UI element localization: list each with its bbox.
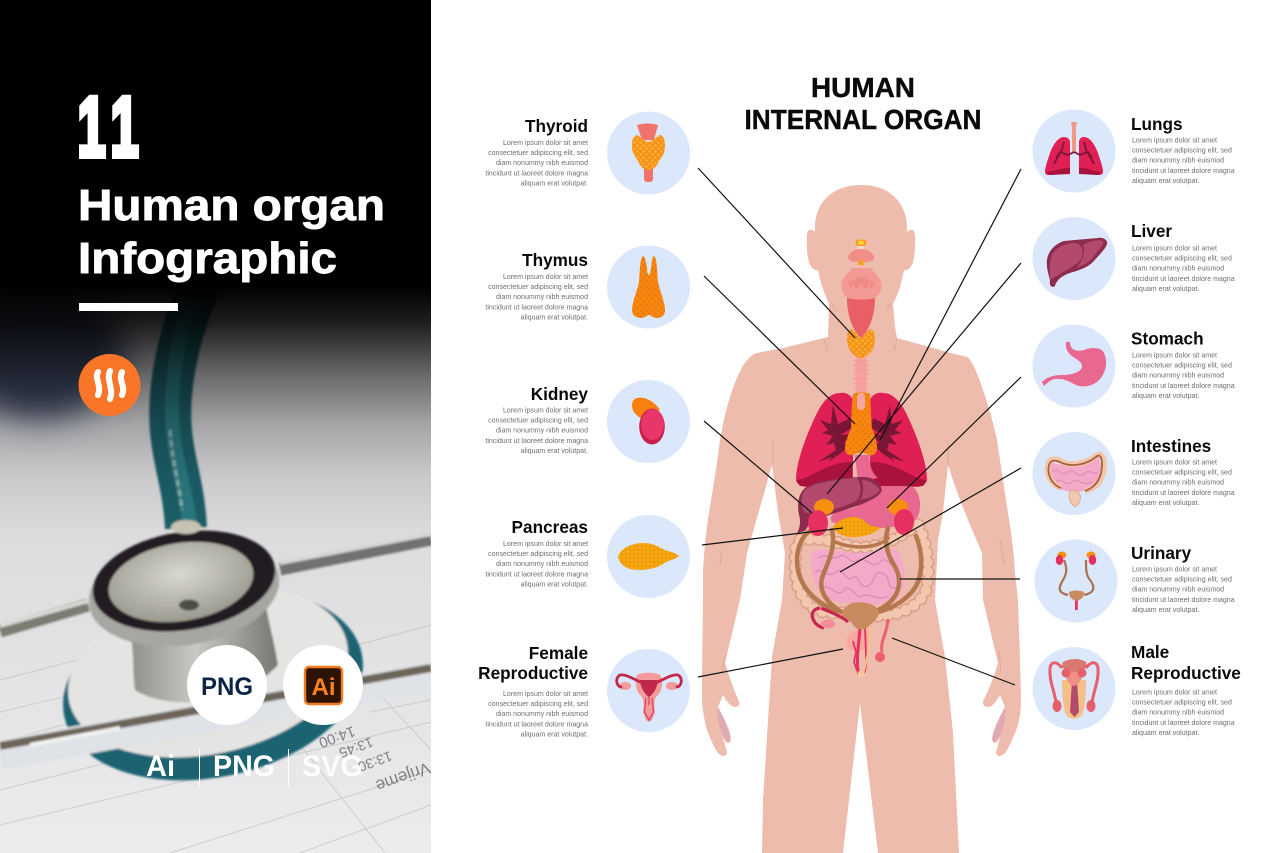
panel: pancreas: consectetuer adipiscing elit, sed bbox=[488, 551, 588, 558]
icon: thymus bbox=[632, 256, 665, 318]
panel: male reproductive: Lorem ipsum dolor sit amet bbox=[1132, 690, 1217, 696]
title: HUMAN bbox=[811, 72, 915, 103]
format labels: Ai PNG SVG bbox=[146, 749, 363, 786]
panel: urinary: tincidunt ut laoreet dolore magna bbox=[1132, 597, 1235, 604]
panel: lungs: Lorem ipsum dolor sit amet bbox=[1132, 138, 1217, 144]
panel: liver: diam nonummy nibh euismod bbox=[1132, 266, 1224, 273]
head organs bbox=[841, 240, 882, 338]
panel: kidney: tincidunt ut laoreet dolore magna bbox=[485, 438, 588, 445]
stomach upper overlay bbox=[855, 455, 878, 482]
panel: male reproductive: diam nonummy nibh euismod bbox=[1132, 710, 1224, 717]
panel: kidney bbox=[485, 380, 690, 463]
panel: stomach: Stomach bbox=[1131, 328, 1204, 348]
panel: urinary: Urinary bbox=[1131, 543, 1192, 563]
heading: Human organ Infographic: Human organ bbox=[78, 181, 385, 230]
panel: stomach: consectetuer adipiscing elit, sed bbox=[1132, 363, 1232, 370]
trachea bbox=[855, 358, 867, 394]
adrenal glands bbox=[814, 499, 834, 515]
divider bar bbox=[79, 303, 178, 311]
panel: pancreas: Lorem ipsum dolor sit amet bbox=[503, 541, 588, 548]
panel: stethoscope photo with black fade bbox=[0, 0, 433, 853]
icon: stomach bbox=[1042, 342, 1106, 386]
panel: stethoscope photo with black fade: 13:30 bbox=[356, 748, 394, 775]
panel: pancreas: Pancreas bbox=[512, 517, 588, 537]
heading: Human organ Infographic: Infographic bbox=[78, 234, 337, 283]
panel: male reproductive: tincidunt ut laoreet dolore magna bbox=[1132, 720, 1235, 727]
panel: liver: tincidunt ut laoreet dolore magna bbox=[1132, 276, 1235, 283]
thyroid bbox=[847, 329, 875, 358]
panel: intestines: Intestines bbox=[1131, 436, 1211, 456]
panel: thymus bbox=[485, 246, 690, 328]
panel: lungs: aliquam erat volutpat. bbox=[1132, 178, 1199, 185]
panel: thymus: Thymus bbox=[522, 250, 588, 270]
heading: Human organ Infographic bbox=[78, 181, 385, 283]
panel: thyroid: aliquam erat volutpat. bbox=[521, 180, 588, 187]
panel: female reproductive: aliquam erat volutpat. bbox=[521, 731, 588, 738]
kidneys bbox=[808, 510, 828, 536]
icon: pancreas bbox=[618, 543, 679, 570]
badge: PNG: PNG bbox=[201, 673, 253, 701]
panel: female reproductive bbox=[478, 643, 690, 738]
panel: female reproductive: tincidunt ut laoreet dolore magna bbox=[485, 721, 588, 728]
body silhouette bbox=[702, 185, 1021, 853]
panel: intestines bbox=[1032, 432, 1235, 515]
panel: intestines: aliquam erat volutpat. bbox=[1132, 500, 1199, 507]
panel: stomach: Lorem ipsum dolor sit amet bbox=[1132, 352, 1217, 360]
panel: female reproductive: Reproductive bbox=[478, 663, 588, 683]
format labels: Ai PNG SVG: Ai bbox=[146, 750, 175, 783]
panel: female reproductive: Female bbox=[529, 643, 588, 663]
bladder bbox=[842, 602, 879, 629]
format labels: Ai PNG SVG: PNG bbox=[213, 750, 275, 783]
panel: lungs bbox=[1032, 110, 1235, 192]
panel: stethoscope photo with black fade: 14:00 bbox=[316, 722, 357, 751]
panel: kidney: Lorem ipsum dolor sit amet bbox=[503, 408, 588, 414]
panel: pancreas bbox=[485, 515, 690, 598]
format labels: Ai PNG SVG: SVG bbox=[302, 750, 363, 783]
panel: male reproductive: Reproductive bbox=[1131, 663, 1241, 683]
panel: liver: Lorem ipsum dolor sit amet bbox=[1132, 246, 1217, 252]
panel: thyroid bbox=[485, 112, 690, 194]
panel: urinary: Lorem ipsum dolor sit amet bbox=[1132, 566, 1217, 574]
thymus bbox=[845, 392, 877, 455]
liver bbox=[797, 477, 882, 533]
panel: liver: consectetuer adipiscing elit, sed bbox=[1132, 256, 1232, 263]
panel: pancreas: aliquam erat volutpat. bbox=[521, 581, 588, 588]
panel: female reproductive: diam nonummy nibh euismod bbox=[496, 711, 588, 718]
leader lines bbox=[698, 168, 1021, 685]
panel: kidney: consectetuer adipiscing elit, sed bbox=[488, 418, 588, 425]
panel: intestines: Lorem ipsum dolor sit amet bbox=[1132, 460, 1217, 466]
icon: kidney bbox=[632, 398, 665, 444]
panel: stomach: aliquam erat volutpat. bbox=[1132, 393, 1199, 400]
panel: intestines: diam nonummy nibh euismod bbox=[1132, 480, 1224, 487]
panel: urinary: aliquam erat volutpat. bbox=[1132, 607, 1199, 614]
panel: thymus: diam nonummy nibh euismod bbox=[496, 294, 588, 301]
human body figure bbox=[702, 185, 1021, 853]
panel: lungs: consectetuer adipiscing elit, sed bbox=[1132, 148, 1232, 155]
panel: male reproductive: Male bbox=[1131, 642, 1169, 662]
panel: male reproductive: consectetuer adipiscing elit, sed bbox=[1132, 700, 1232, 707]
panel: kidney: Kidney bbox=[531, 384, 588, 404]
panel: pancreas: diam nonummy nibh euismod bbox=[496, 561, 588, 568]
panel: lungs: Lungs bbox=[1131, 114, 1183, 134]
panel: urinary: diam nonummy nibh euismod bbox=[1132, 587, 1224, 594]
heading: 11: 11 bbox=[78, 80, 139, 174]
panel: thymus: tincidunt ut laoreet dolore magna bbox=[485, 304, 588, 311]
panel: thymus: consectetuer adipiscing elit, sed bbox=[488, 284, 588, 291]
panel: thyroid: Lorem ipsum dolor sit amet bbox=[503, 140, 588, 147]
panel: lungs: diam nonummy nibh euismod bbox=[1132, 158, 1224, 165]
lungs bbox=[796, 393, 927, 487]
icon: lungs bbox=[1045, 122, 1103, 175]
pancreas bbox=[833, 517, 880, 537]
panel: kidney: aliquam erat volutpat. bbox=[521, 448, 588, 455]
icon: urinary bbox=[1056, 552, 1096, 610]
panel: female reproductive: Lorem ipsum dolor sit amet bbox=[503, 691, 588, 698]
panel: pancreas: tincidunt ut laoreet dolore magna bbox=[485, 571, 588, 578]
panel: intestines: tincidunt ut laoreet dolore magna bbox=[1132, 490, 1235, 497]
panel: female reproductive: consectetuer adipiscing elit, sed bbox=[488, 701, 588, 708]
icon: thyroid bbox=[632, 124, 665, 182]
panel: male reproductive bbox=[1032, 642, 1241, 737]
panel: thymus: Lorem ipsum dolor sit amet bbox=[503, 274, 588, 281]
icon: male reproductive bbox=[1050, 659, 1098, 719]
icon: orange logo bbox=[78, 354, 140, 416]
ureters bbox=[797, 528, 921, 614]
icon: intestines bbox=[1048, 454, 1104, 506]
panel: thyroid: Thyroid bbox=[525, 116, 588, 136]
panel: lungs: tincidunt ut laoreet dolore magna bbox=[1132, 168, 1235, 175]
panel: stethoscope photo with black fade: Vrijeme bbox=[373, 758, 433, 796]
stomach bbox=[831, 457, 920, 528]
icon: female reproductive bbox=[617, 673, 681, 722]
badge: PNG bbox=[187, 645, 267, 725]
small intestine bbox=[811, 548, 905, 604]
icon: liver bbox=[1047, 238, 1107, 287]
badge: Ai bbox=[283, 645, 363, 725]
title: INTERNAL ORGAN bbox=[744, 104, 982, 135]
panel: stethoscope photo with black fade: 13:45 bbox=[337, 734, 375, 761]
panel: stomach: diam nonummy nibh euismod bbox=[1132, 373, 1224, 380]
panel: intestines: consectetuer adipiscing elit, sed bbox=[1132, 470, 1232, 477]
panel: liver: aliquam erat volutpat. bbox=[1132, 286, 1199, 293]
badge: Ai: Ai bbox=[312, 674, 336, 701]
panel: thyroid: diam nonummy nibh euismod bbox=[496, 160, 588, 167]
panel: stomach: tincidunt ut laoreet dolore magna bbox=[1132, 383, 1235, 390]
panel: male reproductive: aliquam erat volutpat. bbox=[1132, 730, 1199, 737]
panel: urinary: consectetuer adipiscing elit, sed bbox=[1132, 577, 1232, 584]
panel: liver bbox=[1032, 217, 1235, 300]
panel: thymus: aliquam erat volutpat. bbox=[521, 314, 588, 321]
large intestine bbox=[795, 524, 928, 616]
panel: thyroid: tincidunt ut laoreet dolore magna bbox=[485, 170, 588, 177]
panel: thyroid: consectetuer adipiscing elit, sed bbox=[488, 150, 588, 157]
panel: kidney: diam nonummy nibh euismod bbox=[496, 428, 588, 435]
panel: urinary bbox=[1034, 540, 1235, 622]
panel: liver: Liver bbox=[1131, 221, 1172, 241]
reproductive organs bbox=[812, 608, 888, 678]
panel: white infographic background bbox=[431, 0, 1280, 853]
title bbox=[744, 72, 982, 135]
panel: stomach bbox=[1032, 324, 1235, 408]
